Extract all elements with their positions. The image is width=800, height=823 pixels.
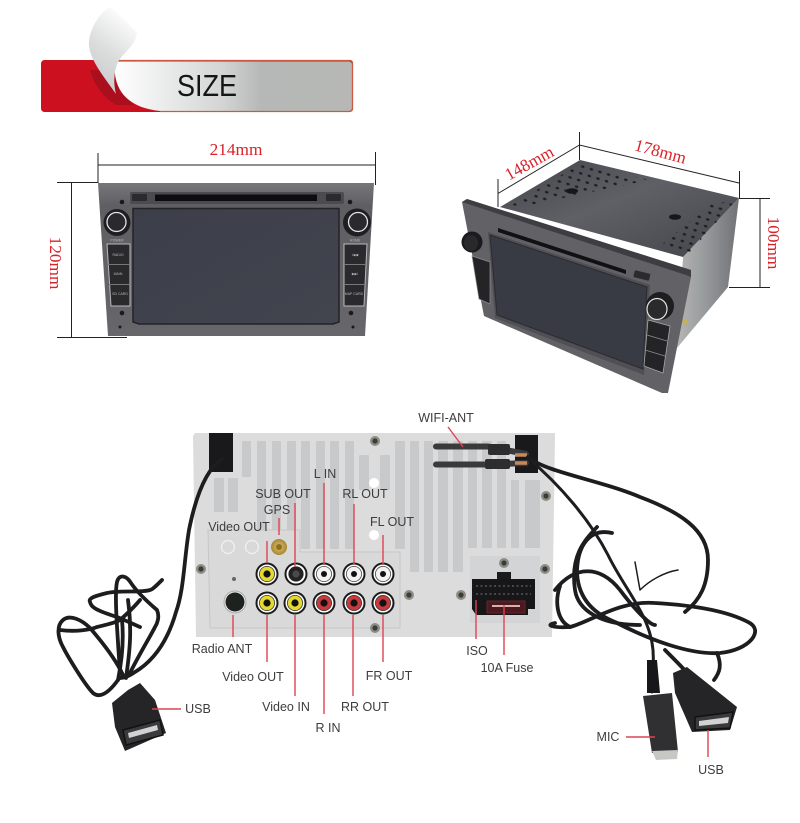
faceplate (462, 199, 691, 393)
cable loops (58, 576, 162, 695)
right button block: MAP CARD (345, 292, 364, 296)
ISO recess (470, 556, 540, 623)
disc slot bar (130, 192, 344, 204)
label: 148mm: 148mm (502, 142, 558, 184)
banner border (110, 60, 353, 112)
top faceplate edge (462, 199, 691, 277)
callout leader lines (152, 427, 708, 757)
screen surround (488, 232, 650, 375)
right buttons (644, 320, 670, 373)
eject button (633, 270, 650, 281)
ventilation holes (510, 164, 736, 252)
callout labels: R IN (316, 721, 340, 735)
callout labels: Video OUT (222, 670, 284, 684)
right button block (344, 244, 367, 306)
right button block: ▶▶I (352, 272, 359, 276)
left button block (107, 244, 130, 306)
callout labels: FR OUT (366, 669, 413, 683)
faceplate (98, 183, 374, 336)
callout labels: USB (698, 763, 724, 777)
panel screws (196, 436, 551, 633)
USB port (123, 720, 163, 745)
MIC strain relief (647, 660, 660, 693)
callout labels: RR OUT (341, 700, 389, 714)
callout labels: RL OUT (342, 487, 388, 501)
3D view head unit (462, 160, 739, 393)
banner red bar (41, 60, 353, 112)
RCA jacks (256, 564, 394, 614)
cable loops (550, 527, 755, 680)
screen (133, 208, 339, 324)
eject button (326, 194, 341, 201)
right knob (343, 208, 371, 236)
page curl (89, 7, 137, 94)
right knob (646, 292, 674, 320)
callout labels: FL OUT (370, 515, 414, 529)
knob captions: HOME (350, 238, 361, 242)
USB plug (112, 683, 166, 751)
radio antenna socket (224, 577, 246, 613)
cable to MIC (528, 458, 653, 692)
label: 178mm: 178mm (632, 136, 689, 168)
GPS gold connector (271, 539, 287, 555)
chassis mounting holes (566, 188, 681, 220)
right cables (528, 457, 755, 760)
chassis side (677, 198, 739, 348)
front view dimension: height (46, 182, 127, 338)
callout labels: L IN (314, 467, 336, 481)
callout labels: 10A Fuse (481, 661, 533, 675)
chassis top (500, 160, 739, 257)
label: 100mm: 100mm (764, 217, 783, 270)
RCA recess (208, 530, 400, 628)
screen (490, 235, 647, 369)
front view dimension: width (98, 140, 376, 185)
mute button (132, 194, 147, 201)
front view head unit (98, 183, 374, 336)
outlined round marks (222, 540, 258, 554)
right strain relief (515, 435, 538, 473)
callout labels: SUB OUT (255, 487, 311, 501)
callout labels: MIC (597, 730, 619, 744)
callout labels: ISO (466, 644, 488, 658)
callout labels: Radio ANT (192, 642, 253, 656)
gold screw (682, 320, 688, 324)
USB plug (673, 667, 737, 732)
rear panel (193, 433, 555, 637)
callout labels: Video OUT (208, 520, 270, 534)
right button block: I◀◀ (352, 253, 359, 257)
disc slot (498, 228, 626, 274)
slats (214, 441, 540, 572)
left knob (104, 209, 130, 236)
left strain relief (209, 433, 233, 472)
front view dimension: width: 214mm (210, 140, 263, 159)
banner heading text: SIZE (177, 68, 237, 103)
USB port (695, 712, 733, 730)
callout labels: Video IN (262, 700, 310, 714)
MIC tip (652, 750, 678, 760)
panel base (193, 433, 555, 637)
left knob (462, 232, 482, 252)
callout labels: USB (185, 702, 211, 716)
cable run (120, 459, 222, 678)
white holes (369, 478, 379, 540)
small face screws (118, 200, 354, 328)
left buttons (472, 256, 490, 304)
left button block: RADIO (112, 253, 124, 257)
banner shadow (90, 70, 134, 105)
knob captions: POWER (110, 238, 124, 242)
left USB cable (58, 459, 222, 751)
callout labels: WIFI-ANT (418, 411, 474, 425)
MIC plug (643, 693, 678, 753)
3D view dimension lines (498, 132, 770, 288)
WIFI antenna connectors (436, 444, 527, 469)
callout labels (185, 411, 724, 777)
front view dimension: height: 120mm (46, 237, 65, 290)
callout labels: GPS (264, 503, 290, 517)
left button block: SD CARD (112, 292, 128, 296)
banner: SIZE heading (41, 7, 353, 112)
ISO connector (472, 572, 535, 615)
knob captions (110, 238, 361, 242)
left button block: MAIN (114, 272, 123, 276)
banner grey face (115, 62, 352, 111)
main cable to USB (528, 457, 708, 612)
disc slot (155, 194, 317, 201)
